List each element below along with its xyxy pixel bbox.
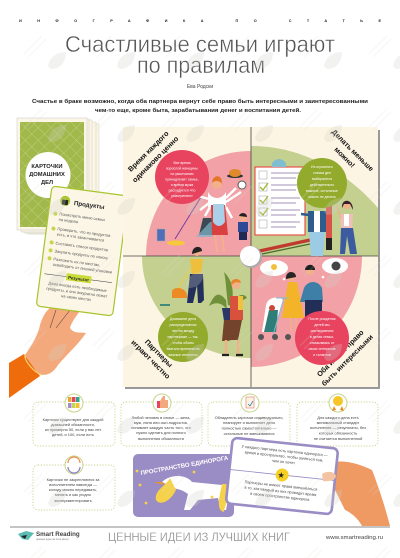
text bubble: do less: списка дел: [313, 171, 331, 175]
website: www.smartreading.ru: [325, 535, 383, 541]
note: anyone understands: муж, няня или сын-подросток,: [134, 420, 188, 425]
note: cards can move: [33, 456, 115, 510]
card icon: [60, 195, 71, 206]
result text: на своих местах: [61, 293, 91, 302]
text bubble: after children: отказываясь от: [310, 341, 335, 345]
card steps: освободить от лишней упаковки: [52, 262, 112, 275]
text bubble: fair split: честно между: [172, 329, 194, 333]
illustration: woman vacuuming: [160, 247, 204, 305]
note: minimum standard: [297, 394, 378, 446]
text bubble: after children: в делах семьи,: [310, 335, 334, 339]
divider with star badge: ★: [277, 471, 285, 480]
text bubble: do less: действительно: [310, 183, 334, 187]
note: anyone understands: выполнения обязанности: [138, 436, 184, 441]
note: card per chore: Карточки существуют для каждой: [43, 417, 103, 422]
card steps: Проверить, что из продуктов: [57, 226, 111, 238]
card steps: Посмотреть меню семьи: [59, 211, 105, 222]
illustration: parents with stroller: [258, 265, 323, 340]
lead text: чем-то еще, кроме быта, зарабатывания денег и воспитания детей.: [95, 107, 301, 114]
title: по правилам: [137, 52, 265, 78]
icon: cycle arrows: [65, 456, 83, 474]
text bubble: fair split: хватало времени на: [167, 347, 199, 351]
deck label: [26, 152, 70, 198]
quadrant heading: right to be interesting: Оба имеют право: [315, 327, 366, 379]
illustration: to-do clipboard: [255, 159, 310, 254]
card title: ПРОСТРАНСТВО ЕДИНОРОГА: [140, 456, 229, 477]
text bubble: fair split: Домашние дела: [170, 317, 196, 321]
note: minimum standard: исполнения — результаты, без: [310, 425, 366, 430]
eyebrow: infographic by article: ИНФОГРАФИКА ПО СТАТЬЕ: [19, 19, 381, 23]
text bubble: do less: [297, 158, 347, 208]
note: owner acts alone: [208, 394, 290, 446]
note: owner acts alone: полностью самостоятельно —: [222, 426, 276, 430]
note: owner acts alone: планирует и выполняет дело: [223, 420, 275, 425]
product card: [36, 186, 128, 316]
thumb over card: [322, 472, 336, 481]
text bubble: do less: важные, остальные: [306, 189, 338, 193]
lead text: Счастье в браке возможно, когда оба партнера вернут себе право быть интересными и заинтересованными: [32, 98, 368, 105]
note: card per chore: детей, и 100, если есть: [52, 432, 94, 437]
icon: unicorn: [136, 470, 229, 512]
card steps: Закупить продукты по списку: [54, 248, 108, 260]
text bubble: fair split: партнерами — так,: [168, 335, 198, 339]
quadrant heading: time: одинаково ценно: [130, 134, 181, 184]
deck label: КАРТОЧКИ: [31, 164, 63, 170]
footer slogan: ЦЕННЫЕ ИДЕИ ИЗ ЛУЧШИХ КНИГ: [108, 532, 291, 544]
note: card per chore: их примерно 50, если у вас нет: [45, 427, 101, 432]
title: [65, 31, 335, 78]
hand holding card: [9, 301, 86, 398]
quadrant heading: time: Время каждого: [126, 129, 171, 173]
text bubble: default time: Все время: [173, 161, 191, 165]
quadrant heading: play fair: Партнеры: [143, 337, 175, 369]
result text: Дома всегда есть необходимые: [48, 280, 108, 293]
text bubble: do less: выбираются: [312, 177, 332, 181]
text bubble: do less: можно не делать: [308, 195, 336, 199]
icon: thumbs up: [153, 394, 171, 412]
quadrant heading: do less: можно!: [332, 145, 357, 170]
illustration: thought clouds: [260, 258, 348, 280]
quadrant heading: play fair: играют честно: [129, 338, 173, 381]
note: minimum standard: минимальный стандарт: [317, 420, 360, 425]
card deck: household cards: [17, 118, 99, 234]
text bubble: default time: по умолчанию: [170, 172, 194, 176]
question text: время и пространство, чтобы заняться тем,: [245, 449, 324, 463]
author: Ева Родски: [187, 84, 213, 90]
illustration: woman with many arms: [157, 169, 248, 252]
card steps: Составить список продуктов: [55, 240, 108, 252]
note: anyone understands: [121, 394, 202, 446]
card steps: Разложить их по местам,: [53, 256, 100, 267]
text bubble: fair split: распределяются: [170, 323, 197, 327]
card steps: на неделю: [58, 217, 79, 224]
note: minimum standard: не считается выполненной: [314, 436, 362, 441]
deck label: ДОМАШНИХ: [29, 172, 65, 178]
text bubble: after children: растворяемся: [311, 329, 334, 333]
result text: продукты, и они аккуратно лежат: [46, 286, 108, 299]
main quadrant panel: [123, 127, 380, 389]
text bubble: after children: и талантов: [313, 353, 331, 357]
rule text: в то, как каждый из них проводит время: [244, 485, 317, 497]
icon: checklist: [241, 394, 259, 412]
card steps: есть, в что заканчивается: [56, 232, 105, 243]
note: cards can move: менять и как угодно: [55, 492, 91, 497]
logo: Smart Reading: ценные идеи за пять минут: [36, 538, 70, 541]
text bubble: after children: детей мы: [314, 323, 330, 327]
icon: medal: [329, 394, 347, 412]
note: anyone understands: понимает каждую часть того, что: [131, 425, 191, 430]
text bubble: default time: усмотрению»: [171, 194, 193, 198]
text bubble: after children: [295, 311, 349, 365]
unicorn rule card: [226, 438, 338, 514]
question text: чем он хочет: [272, 458, 296, 465]
illustration: man with plant: [209, 272, 247, 355]
text bubble: fair split: важные интересы: [168, 353, 198, 357]
note: anyone understands: Любой человек в семье — жена,: [132, 415, 190, 420]
note: cards can move: Карточки не закрепляются за: [47, 477, 100, 482]
text bubble: default time: а время мужа: [171, 183, 193, 187]
text bubble: fair split: [158, 312, 208, 362]
question text: У каждого партнера есть карточка единорога —: [241, 444, 328, 458]
rule text: в своем пространстве единорога: [250, 491, 311, 502]
card steps: [47, 210, 119, 275]
unicorn space card: [133, 454, 234, 517]
text bubble: after children: своих интересов: [308, 347, 336, 351]
note: owner acts alone: остальные не вмешиваются: [224, 431, 274, 436]
text bubble: fair split: чтобы обоим: [172, 341, 194, 345]
hand holding unicorn card: [335, 461, 390, 526]
note: owner acts alone: Обладатель карточки индивидуально,: [215, 415, 283, 420]
center disc: [240, 246, 262, 268]
note: cards can move: исполнителем навсегда —: [49, 482, 97, 487]
text bubble: after children: После рождения: [308, 317, 336, 321]
text bubble: default time: расходуется «по: [169, 188, 195, 192]
icon: color grid: [65, 394, 83, 412]
text bubble: default time: [155, 150, 209, 204]
footer rule: [10, 526, 390, 528]
result label: Результат: [68, 275, 89, 283]
logo: Smart Reading: Smart Reading: [36, 531, 80, 538]
note: cards can move: колоду можно передавать,: [49, 487, 97, 492]
text bubble: do less: Из огромного: [311, 165, 333, 169]
deck label: ДЕЛ: [41, 180, 53, 186]
text bubble: default time: взрослой женщины: [166, 166, 198, 170]
quadrant heading: do less: Делать меньше: [330, 127, 376, 173]
title: Счастливые семьи играют: [65, 31, 335, 57]
note: minimum standard: которых обязанность: [319, 430, 357, 436]
note: cards can move: экспериментировать: [54, 498, 92, 503]
note: card per chore: [33, 394, 115, 446]
card heading: Продукты: [73, 200, 105, 211]
result text: [45, 280, 108, 304]
text bubble: default time: принадлежит семье,: [165, 178, 199, 182]
illustration: couple with pencil: [301, 195, 357, 256]
rule text: [243, 479, 318, 503]
note: anyone understands: нужно сделать для полного: [136, 430, 186, 435]
question text: [240, 444, 328, 469]
lead text: [32, 98, 368, 114]
rule text: Партнеры не имеют права вмешиваться: [244, 479, 318, 492]
note: card per chore: домашней обязанности,: [51, 422, 95, 427]
logo: Smart Reading: [18, 531, 80, 541]
note: minimum standard: Для каждого дела есть: [317, 415, 359, 420]
quadrant heading: right to be interesting: быть интересными: [320, 333, 375, 388]
